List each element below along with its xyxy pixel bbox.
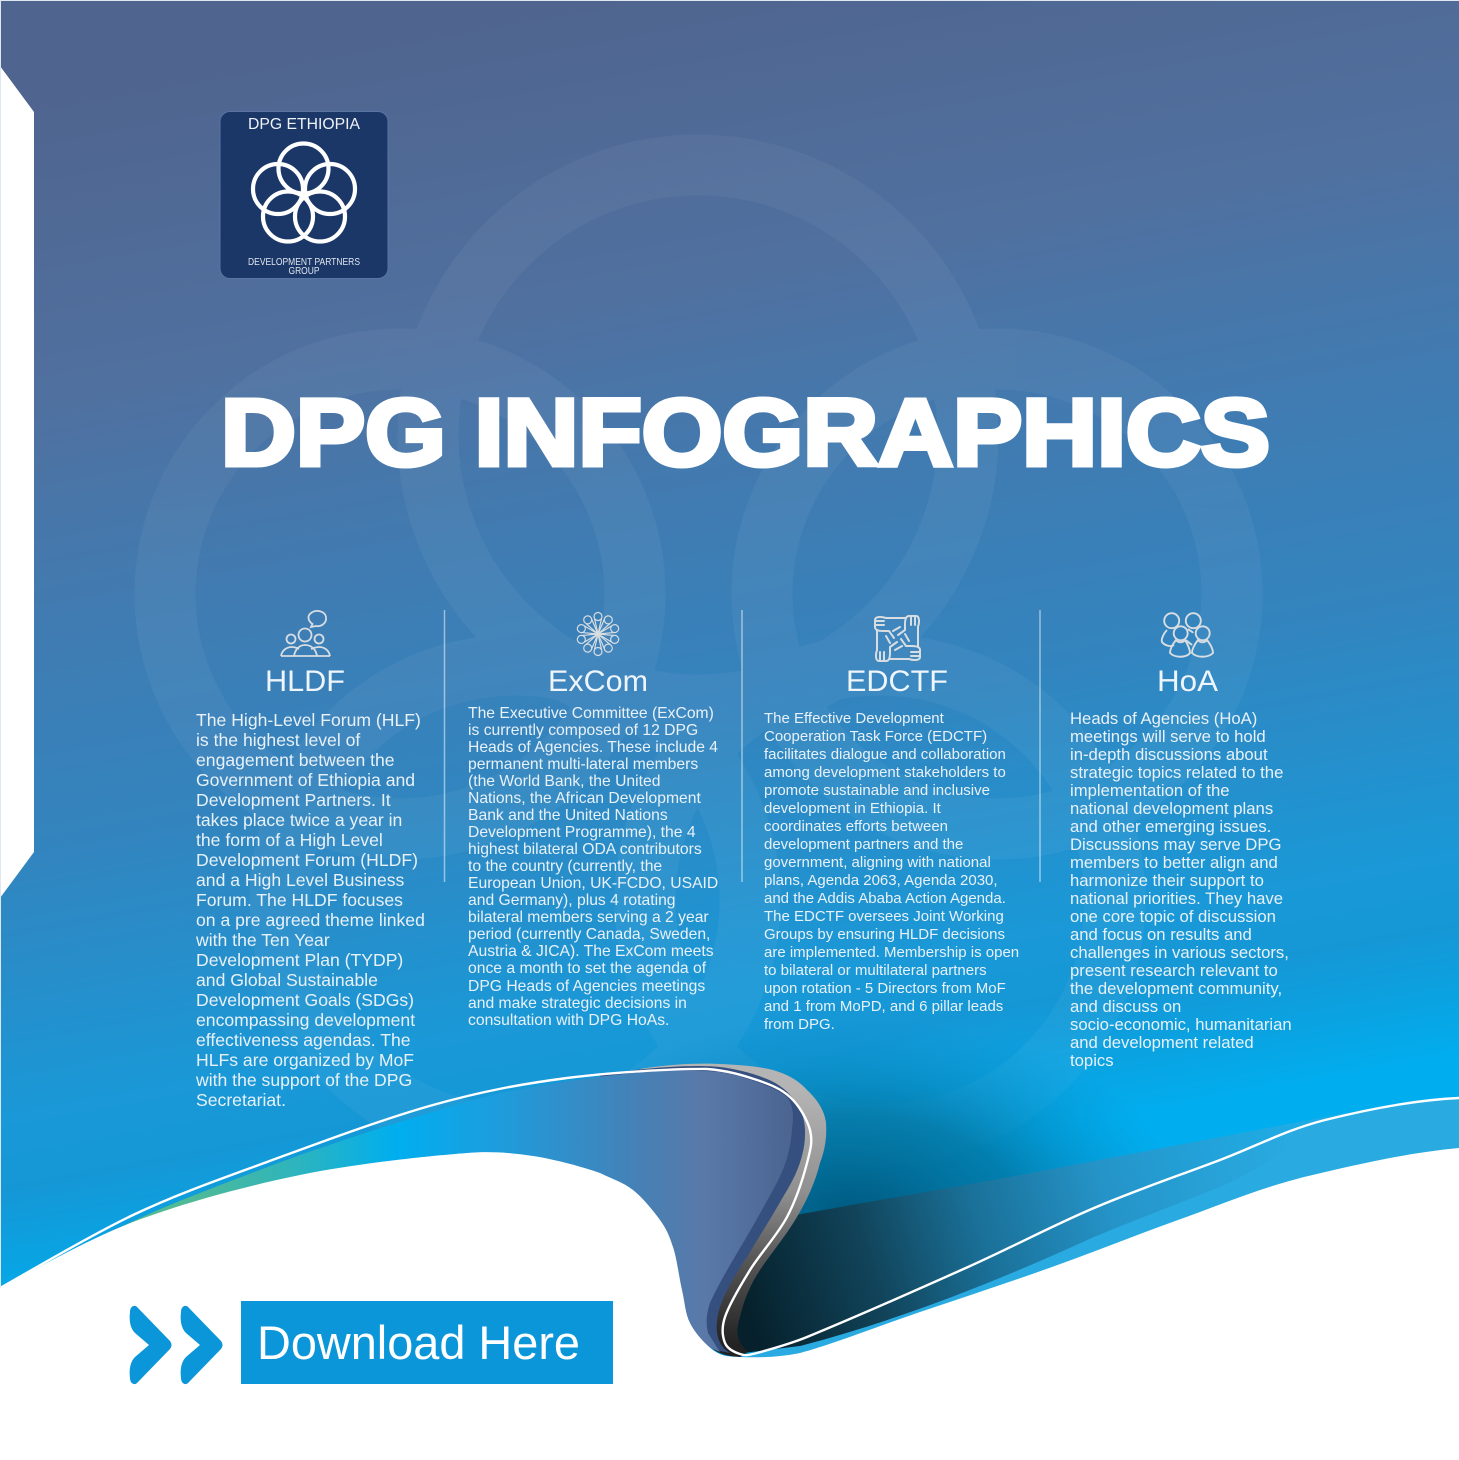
text: HoA description: Discussions may serve DPG: [1070, 835, 1281, 854]
text: HoA description: one core topic of discussion: [1070, 907, 1276, 926]
text: HoA description: challenges in various sectors,: [1070, 943, 1289, 962]
text: HLDF description: [196, 710, 425, 1110]
text: EDCTF description: The EDCTF oversees Joint Working: [764, 908, 1004, 925]
text: HLDF description: Development Goals (SDGs): [196, 990, 414, 1010]
text: HoA description: present research relevant to: [1070, 961, 1278, 980]
logo caption: DEVELOPMENT PARTNERS: [248, 257, 360, 268]
text: HoA description: Heads of Agencies (HoA): [1070, 709, 1257, 728]
text: EDCTF description: and the Addis Ababa Action Agenda.: [764, 890, 1006, 907]
text: HoA description: and focus on results and: [1070, 925, 1252, 944]
text: HLDF description: encompassing development: [196, 1010, 415, 1030]
fold shadow: [510, 1015, 1190, 1415]
text: HoA description: in-depth discussions about: [1070, 745, 1268, 764]
text: HoA description: topics: [1070, 1051, 1114, 1070]
text: HLDF description: with the support of the DPG: [196, 1070, 412, 1090]
text: EDCTF description: Groups by ensuring HLDF decisions: [764, 926, 1005, 943]
text: EDCTF description: coordinates efforts between: [764, 818, 948, 835]
text: HoA description: harmonize their support to: [1070, 871, 1264, 890]
text: HoA description: strategic topics related to the: [1070, 763, 1283, 782]
text: EDCTF description: promote sustainable and inclusive: [764, 782, 990, 799]
watermark: five ring logo: [165, 165, 1232, 1135]
text: HLDF description: takes place twice a year in: [196, 810, 402, 830]
blue fold with green tail: [0, 1071, 793, 1352]
text: EDCTF description: among development stakeholders to: [764, 764, 1006, 781]
logo heading: DPG ETHIOPIA: [248, 116, 360, 133]
text: HoA description: and other emerging issues.: [1070, 817, 1271, 836]
download button: Download Here: [257, 1316, 580, 1369]
text: HLDF description: effectiveness agendas. The: [196, 1030, 411, 1050]
text: EDCTF description: development partners and the: [764, 836, 963, 853]
text: ExCom description: [468, 705, 718, 1029]
text: HoA description: and development related: [1070, 1033, 1254, 1052]
text: HLDF description: Government of Ethiopia and: [196, 770, 415, 790]
text: ExCom description: Nations, the African Development: [468, 790, 701, 807]
text: ExCom description: Austria & JICA). The ExCom meets: [468, 943, 714, 960]
logo caption: GROUP: [288, 266, 320, 277]
text: EDCTF description: facilitates dialogue and collaboration: [764, 746, 1006, 763]
text: HLDF description: engagement between the: [196, 750, 395, 770]
icon: executive circle: [576, 612, 620, 656]
icon: four joined hands: [875, 616, 920, 661]
text: HLDF description: with the Ten Year: [196, 930, 330, 950]
text: HLDF description: Development Plan (TYDP): [196, 950, 403, 970]
dark blue fold band: [600, 1066, 805, 1353]
text: HLDF description: and Global Sustainable: [196, 970, 378, 990]
text: ExCom description: to the country (currently, the: [468, 858, 662, 875]
text: EDCTF description: development in Ethiopia. It: [764, 800, 941, 817]
text: HoA description: national development plans: [1070, 799, 1273, 818]
text: HoA description: the development community,: [1070, 979, 1282, 998]
text: EDCTF description: and 1 from MoPD, and 6 pillar leads: [764, 998, 1003, 1015]
main title: DPG INFOGRAPHICS: [221, 380, 1270, 486]
text: HoA description: and discuss on: [1070, 997, 1181, 1016]
text: ExCom description: Heads of Agencies. These include 4: [468, 739, 718, 756]
download button: [241, 1301, 613, 1384]
text: EDCTF description: are implemented. Membership is open: [764, 944, 1019, 961]
text: HoA description: national priorities. They have: [1070, 889, 1283, 908]
text: EDCTF description: upon rotation - 5 Directors from MoF: [764, 980, 1006, 997]
white swoosh line: [0, 1069, 1459, 1355]
icon: people with speech bubble: [281, 611, 330, 656]
text: HLDF description: The High-Level Forum (HLF): [196, 710, 421, 730]
logo rings: [253, 144, 355, 242]
dark page-curl shading: [725, 1113, 1346, 1354]
text: ExCom description: highest bilateral ODA contributors: [468, 841, 702, 858]
text: HLDF description: and a High Level Business: [196, 870, 404, 890]
text: EDCTF description: to bilateral or multilateral partners: [764, 962, 987, 979]
text: ExCom description: bilateral members serving a 2 year: [468, 909, 709, 926]
text: ExCom description: Development Programme), the 4: [468, 824, 696, 841]
text: HLDF description: HLFs are organized by MoF: [196, 1050, 414, 1070]
text: EDCTF description: Cooperation Task Force (EDCTF): [764, 728, 987, 745]
text: EDCTF description: plans, Agenda 2063, Agenda 2030,: [764, 872, 998, 889]
text: ExCom description: (the World Bank, the United: [468, 773, 660, 790]
text: ExCom description: once a month to set the agenda of: [468, 960, 706, 977]
text: HLDF description: on a pre agreed theme linked: [196, 910, 425, 930]
heading: ExCom: ExCom: [548, 665, 648, 698]
text: ExCom description: consultation with DPG HoAs.: [468, 1012, 669, 1029]
text: HoA description: socio-economic, humanitarian: [1070, 1015, 1292, 1034]
text: HoA description: [1070, 709, 1292, 1070]
text: EDCTF description: The Effective Development: [764, 710, 944, 727]
heading: HoA: HoA: [1157, 665, 1218, 698]
text: HLDF description: Forum. The HLDF focuses: [196, 890, 403, 910]
logo badge: [220, 112, 388, 278]
text: HLDF description: is the highest level of: [196, 730, 360, 750]
text: HLDF description: Development Partners. It: [196, 790, 391, 810]
text: ExCom description: The Executive Committee (ExCom): [468, 705, 714, 722]
icon: group of heads of agencies: [1162, 613, 1213, 657]
light blue ribbon: [740, 1098, 1459, 1360]
heading: HLDF: HLDF: [265, 665, 345, 698]
text: HLDF description: Secretariat.: [196, 1090, 286, 1110]
text: EDCTF description: [764, 710, 1019, 1033]
text: ExCom description: DPG Heads of Agencies meetings: [468, 978, 705, 994]
text: ExCom description: and make strategic decisions in: [468, 995, 687, 1012]
heading: EDCTF: EDCTF: [846, 665, 948, 698]
text: EDCTF description: from DPG.: [764, 1016, 835, 1033]
column dividers: [444, 610, 1040, 882]
text: ExCom description: Bank and the United Nations: [468, 807, 668, 824]
text: HoA description: implementation of the: [1070, 781, 1230, 800]
text: ExCom description: and Germany), plus 4 rotating: [468, 892, 676, 909]
text: EDCTF description: government, aligning with national: [764, 854, 991, 871]
white lower area: [0, 1148, 1459, 1460]
text: HoA description: meetings will serve to hold: [1070, 727, 1266, 746]
text: HoA description: members to better align and: [1070, 853, 1278, 872]
chevron arrows: [130, 1306, 222, 1384]
text: HLDF description: Development Forum (HLDF): [196, 850, 418, 870]
text: ExCom description: permanent multi-lateral members: [468, 756, 698, 773]
text: ExCom description: period (currently Canada, Sweden,: [468, 926, 710, 943]
text: ExCom description: European Union, UK-FCDO, USAID: [468, 875, 718, 892]
grey fold edge: [640, 1064, 826, 1357]
text: ExCom description: is currently composed of 12 DPG: [468, 722, 698, 739]
text: HLDF description: the form of a High Level: [196, 830, 383, 850]
left white tab: [0, 66, 34, 898]
logo caption: [248, 257, 360, 277]
